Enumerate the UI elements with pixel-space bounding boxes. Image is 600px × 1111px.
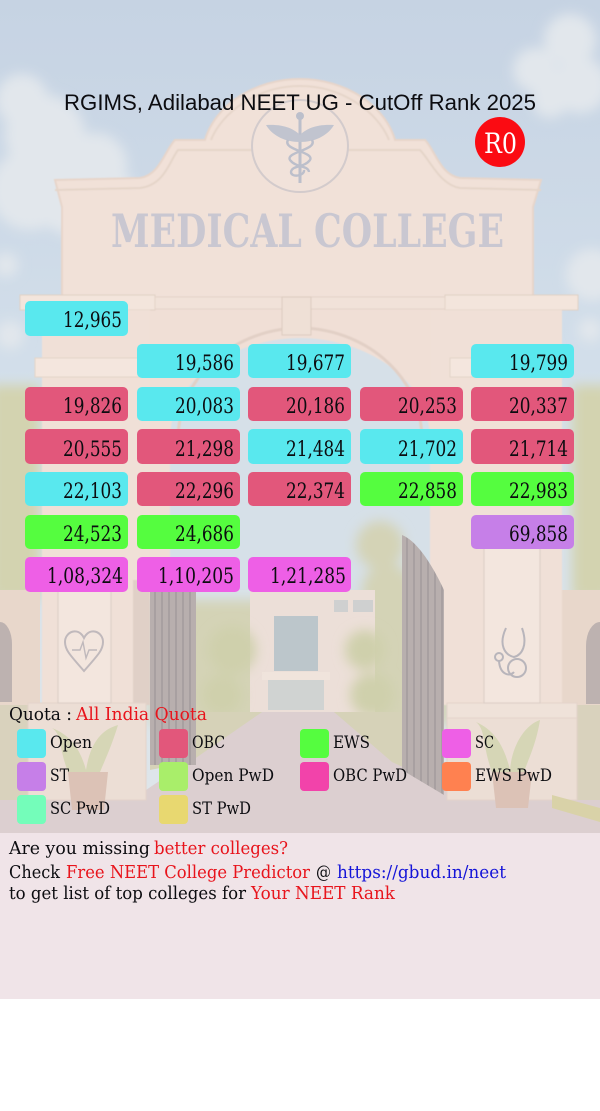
upper wall and pediment bbox=[55, 79, 541, 310]
round badge: R0 bbox=[475, 117, 525, 167]
round badge: R0: R0 bbox=[484, 127, 517, 160]
legend item: Open PwD bbox=[159, 762, 274, 791]
rank cells row 5: 22,103 bbox=[63, 479, 122, 503]
hedges beside path bbox=[150, 712, 405, 770]
rank cells row 3 bbox=[25, 387, 574, 421]
rank cells row 3: 19,826 bbox=[63, 394, 122, 418]
rank cells row 6: 24,686 bbox=[175, 522, 234, 546]
legend item: OBC bbox=[159, 729, 225, 758]
promo line 2: Check bbox=[9, 862, 61, 883]
rank cells row 6: 69,858 bbox=[509, 522, 568, 546]
promo line 2: https://gbud.in/neet bbox=[337, 862, 507, 883]
legend item: SC PwD: SC PwD bbox=[50, 799, 110, 818]
rank cells row 3: 20,337 bbox=[509, 394, 568, 418]
promo line 2: @ bbox=[316, 862, 331, 883]
legend item: ST: ST bbox=[50, 766, 69, 785]
legend item: Open bbox=[17, 729, 92, 758]
promo line 1: better colleges? bbox=[154, 838, 288, 859]
rank cells row 7 bbox=[25, 557, 351, 592]
rank cells row 7: 1,10,205 bbox=[158, 564, 234, 588]
promo line 1: Are you missing bbox=[8, 838, 150, 859]
planters bbox=[52, 720, 540, 810]
rank cell row 1: 12,965 bbox=[63, 308, 122, 332]
rank cells row 6: 24,523 bbox=[63, 522, 122, 546]
promo line 1 bbox=[8, 838, 288, 859]
legend item: ST PwD bbox=[159, 795, 251, 824]
promo line 2 bbox=[9, 862, 507, 883]
iron gates bbox=[150, 535, 444, 795]
legend item: ST PwD: ST PwD bbox=[192, 799, 251, 818]
rank cells row 2 bbox=[137, 344, 574, 378]
promo line 2: Free NEET College Predictor bbox=[66, 862, 310, 883]
legend item: EWS: EWS bbox=[333, 733, 370, 752]
rank cells row 2: 19,677 bbox=[286, 351, 345, 375]
quota heading: Quota : bbox=[9, 704, 72, 725]
icon: stethoscope bbox=[495, 628, 526, 677]
rank cells row 4: 20,555 bbox=[63, 437, 122, 461]
clouds bbox=[0, 14, 600, 349]
legend bbox=[17, 729, 552, 824]
ground path bbox=[0, 712, 600, 833]
rank cells row 2: 19,586 bbox=[175, 351, 234, 375]
back building bbox=[250, 590, 375, 712]
rank cells row 6 bbox=[25, 515, 574, 549]
foreground trees bbox=[202, 626, 394, 717]
legend item: EWS PwD: EWS PwD bbox=[475, 766, 552, 785]
quota heading bbox=[9, 704, 207, 725]
rank cells row 5: 22,858 bbox=[398, 479, 457, 503]
icon: heart bbox=[65, 631, 103, 671]
legend item: Open: Open bbox=[50, 733, 92, 752]
trees behind gate bbox=[0, 385, 600, 600]
legend item: OBC PwD: OBC PwD bbox=[333, 766, 407, 785]
curb bbox=[552, 795, 600, 822]
legend item: ST bbox=[17, 762, 69, 791]
rank cells row 4 bbox=[25, 429, 574, 464]
promo line 3 bbox=[9, 883, 396, 904]
quota heading: All India Quota bbox=[75, 704, 207, 725]
title: RGIMS, Adilabad NEET UG - CutOff Rank 2025 bbox=[64, 90, 536, 115]
rank cells row 4: 21,298 bbox=[175, 437, 234, 461]
rank cells row 4: 21,702 bbox=[398, 437, 457, 461]
legend item: OBC PwD bbox=[300, 762, 407, 791]
rank cells row 3: 20,186 bbox=[286, 394, 345, 418]
rank cells row 5: 22,296 bbox=[175, 479, 234, 503]
central tree mass bbox=[150, 521, 450, 725]
rank cells row 5: 22,374 bbox=[286, 479, 345, 503]
legend item: SC bbox=[442, 729, 494, 758]
legend item: SC: SC bbox=[475, 733, 494, 752]
rank cells row 5 bbox=[25, 472, 574, 506]
background: medical college gate illustration bbox=[0, 0, 600, 833]
rank cells row 7: 1,21,285 bbox=[270, 564, 346, 588]
rank cell row 1 bbox=[25, 301, 128, 336]
legend item: SC PwD bbox=[17, 795, 110, 824]
rank cells row 7: 1,08,324 bbox=[47, 564, 123, 588]
rank cells row 4: 21,714 bbox=[509, 437, 568, 461]
legend item: Open PwD: Open PwD bbox=[192, 766, 274, 785]
rank cells row 5: 22,983 bbox=[509, 479, 568, 503]
arch and pillars bbox=[20, 295, 578, 800]
rank cells row 4: 21,484 bbox=[286, 437, 345, 461]
cutoff rank grid bbox=[25, 301, 574, 592]
promo line 3: to get list of top colleges for bbox=[9, 883, 246, 904]
legend item: OBC: OBC bbox=[192, 733, 225, 752]
arch inner sky bbox=[170, 330, 430, 590]
legend item: EWS PwD bbox=[442, 762, 552, 791]
panel: college predictor promo bbox=[0, 833, 600, 999]
legend item: EWS bbox=[300, 729, 370, 758]
rank cells row 2: 19,799 bbox=[509, 351, 568, 375]
promo line 3: Your NEET Rank bbox=[250, 883, 396, 904]
rank cells row 3: 20,253 bbox=[398, 394, 457, 418]
medallion: caduceus bbox=[252, 100, 348, 192]
rank cells row 3: 20,083 bbox=[175, 394, 234, 418]
side walls bbox=[0, 590, 600, 800]
